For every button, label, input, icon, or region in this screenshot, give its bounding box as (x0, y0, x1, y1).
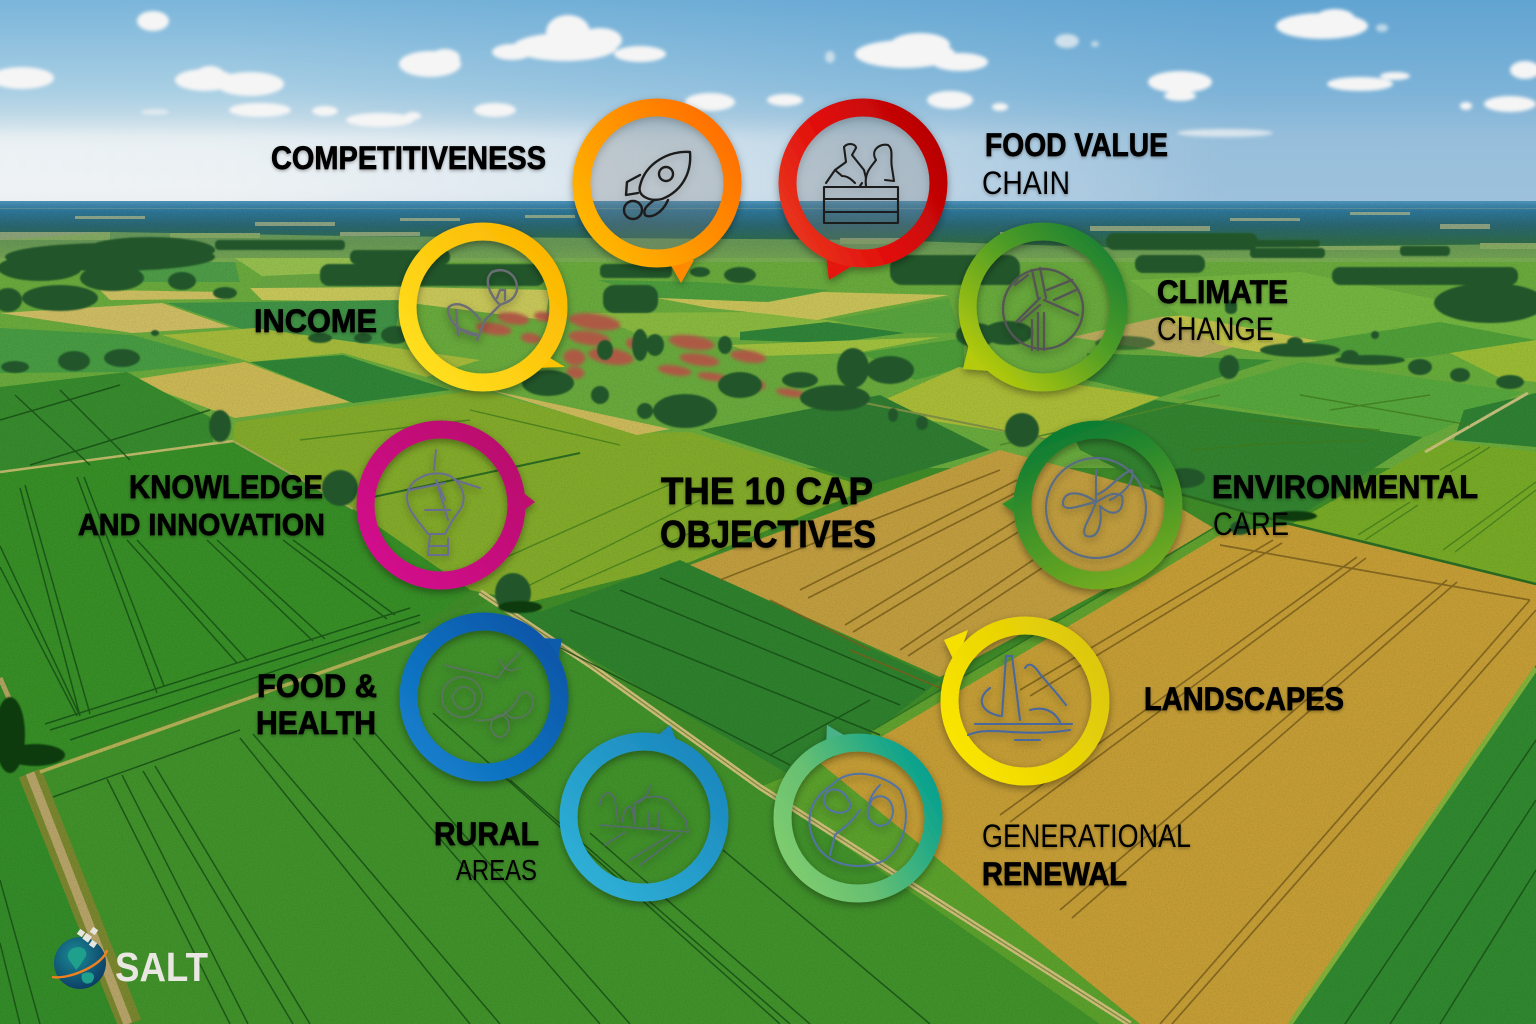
label: food and health: HEALTH (256, 705, 376, 741)
label: knowledge and innovation (78, 469, 325, 542)
icon: globe with orbit and satellite (52, 927, 107, 989)
icon: heads (809, 774, 906, 866)
ring: landscapes (944, 626, 1100, 776)
icon: sailboat landscape (968, 656, 1072, 740)
icon: food crate (824, 144, 898, 223)
icon: wind turbine (1003, 268, 1083, 350)
trees (0, 233, 1536, 613)
ring: food value chain (788, 108, 938, 280)
icon: farm buildings (600, 785, 688, 865)
label: income: INCOME (254, 303, 377, 339)
title: THE 10 CAP (661, 471, 873, 513)
crop rows (0, 385, 1536, 1024)
label: food value chain: FOOD VALUE (985, 127, 1168, 163)
label: environmental care: CARE (1213, 506, 1289, 542)
label: climate change: CLIMATE (1157, 274, 1288, 310)
icon: light bulb (407, 450, 480, 555)
label: climate change (1157, 274, 1288, 347)
label: food and health (256, 668, 377, 741)
logo: SALT (52, 927, 208, 990)
ring: knowledge and innovation (366, 430, 535, 580)
label: landscapes: LANDSCAPES (1144, 681, 1344, 717)
label: knowledge and innovation: KNOWLEDGE (129, 469, 323, 505)
label: rural areas: RURAL (434, 816, 539, 852)
label: food value chain (982, 127, 1168, 201)
ring: food and health (408, 622, 562, 772)
label: environmental care: ENVIRONMENTAL (1212, 469, 1478, 505)
tree shadow and field-edge tree (0, 511, 1317, 773)
icon: vegetables (442, 652, 533, 737)
label: generational renewal: RENEWAL (982, 856, 1127, 892)
ring: climate change (963, 232, 1118, 382)
logo wordmark: SALT (115, 944, 208, 990)
label: environmental care (1212, 469, 1478, 542)
icon: sprout (448, 270, 517, 340)
label: rural areas: AREAS (456, 855, 537, 887)
label: knowledge and innovation: AND INNOVATION (78, 507, 325, 542)
background: sky with clouds (0, 0, 1536, 204)
label: competitiveness: COMPETITIVENESS (271, 140, 546, 176)
far pale field patches (0, 208, 1536, 250)
ring: competitiveness (582, 108, 732, 283)
ring: income (408, 232, 565, 382)
ring: generational renewal (782, 725, 934, 894)
paths and boundary strips (0, 393, 1536, 1024)
title: OBJECTIVES (660, 514, 876, 556)
label: food value chain: CHAIN (982, 165, 1070, 201)
label: generational renewal (982, 818, 1191, 892)
ring: rural areas (568, 725, 720, 892)
label: climate change: CHANGE (1157, 311, 1274, 347)
icon: rocket (624, 152, 690, 219)
title (660, 471, 876, 556)
village roofs (471, 298, 813, 411)
label: food and health: FOOD & (257, 668, 377, 704)
label: rural areas (434, 816, 539, 887)
icon: flower in a circle (1046, 458, 1146, 558)
ring: environmental care (1002, 430, 1174, 580)
label: generational renewal: GENERATIONAL (982, 818, 1191, 854)
